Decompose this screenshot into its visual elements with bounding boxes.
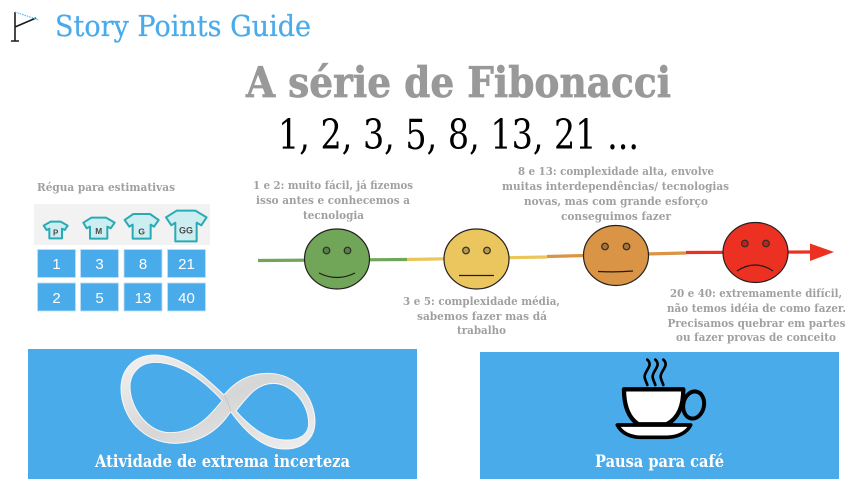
caption: 8 e 13: conseguimos fazer xyxy=(561,209,672,223)
tile: 5: 5 xyxy=(95,290,104,307)
icon: coffee cup xyxy=(617,360,707,437)
heading: Story Points Guide: Story Points Guide xyxy=(55,9,311,43)
tile: 40: 40 xyxy=(178,290,195,307)
tile: 21 xyxy=(168,250,206,278)
tile: 2 xyxy=(38,283,76,311)
caption: 20 e 40: ou fazer provas de conceito xyxy=(676,330,836,344)
t-shirt sizes strip xyxy=(34,204,210,245)
tile: 8 xyxy=(124,250,162,278)
panel: extreme uncertainty xyxy=(28,349,417,479)
caption: 8 e 13: muitas interdependências/ tecnologias xyxy=(502,179,729,193)
face: green smiling xyxy=(304,229,370,289)
caption: 20 e 40 xyxy=(667,286,846,344)
icon: t-shirt P: P xyxy=(53,228,59,237)
tile: 8: 8 xyxy=(139,256,147,273)
icon: t-shirt M: M xyxy=(95,226,102,236)
caption: 8 e 13: novas, mas com grande esforço xyxy=(524,194,708,208)
caption: 1 e 2: isso antes e conhecemos a xyxy=(256,193,410,207)
caption: 3 e 5 xyxy=(403,294,560,337)
tile: 40 xyxy=(168,283,206,311)
icon: t-shirt GG xyxy=(166,211,207,241)
icon: t-shirt P xyxy=(44,222,68,238)
tile: 13 xyxy=(124,283,162,311)
tile: 21: 21 xyxy=(178,256,195,273)
caption: 8 e 13 xyxy=(502,164,729,223)
tile: 13: 13 xyxy=(135,290,151,307)
title: A série de Fibonacci: A série de Fibonacci xyxy=(245,58,671,107)
arrow: complexity scale xyxy=(258,244,834,261)
panel: coffee break xyxy=(480,352,839,479)
caption: 1 e 2 xyxy=(253,178,413,222)
icon: t-shirt G: G xyxy=(138,227,145,237)
icon: t-shirt G xyxy=(125,214,159,239)
ruler heading: Régua para estimativas xyxy=(37,180,175,194)
tile: 2: 2 xyxy=(52,290,61,307)
face: yellow neutral xyxy=(444,229,509,289)
caption: 1 e 2: 1 e 2: muito fácil, já fizemos xyxy=(253,178,413,192)
panel label: Pausa para café xyxy=(595,452,724,471)
tile: 3: 3 xyxy=(95,256,104,273)
tile: 1: 1 xyxy=(52,256,61,273)
Fibonacci numbers: 1, 2, 3, 5, 8, 13, 21 ... xyxy=(278,111,639,159)
caption: 3 e 5: sabemos fazer mas dá xyxy=(417,309,548,323)
face: red sad xyxy=(723,222,788,282)
caption: 3 e 5: trabalho xyxy=(457,323,506,337)
tile: 1 xyxy=(38,250,76,278)
caption: 8 e 13: 8 e 13: complexidade alta, envolve xyxy=(518,164,714,178)
caption: 1 e 2: tecnologia xyxy=(303,208,364,222)
icon: t-shirt GG: GG xyxy=(179,225,193,235)
icon: t-shirt M xyxy=(83,218,115,239)
face: orange neutral xyxy=(584,226,648,286)
icon: infinity xyxy=(121,355,315,449)
panel label: Atividade de extrema incerteza xyxy=(94,452,350,471)
tile: 3 xyxy=(80,250,118,278)
icon: flag xyxy=(11,12,39,41)
panel: estimation ruler xyxy=(34,180,210,311)
tile: 5 xyxy=(80,283,118,311)
caption: 3 e 5: 3 e 5: complexidade média, xyxy=(403,294,560,308)
